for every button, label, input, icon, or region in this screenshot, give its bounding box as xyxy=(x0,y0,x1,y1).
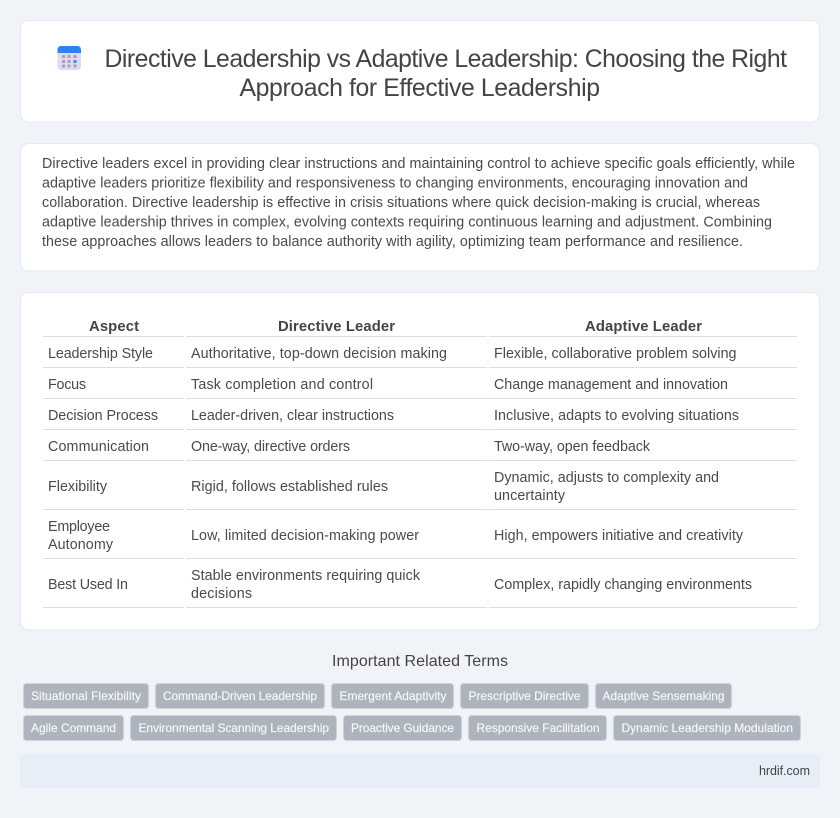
row: decision process: Decision Process xyxy=(48,408,158,424)
tag: Dynamic Leadership Modulation xyxy=(614,716,800,740)
text block: summary: these approaches allows leaders to balance authority with agility, optimizing team performance and resilience. xyxy=(42,234,743,250)
row: focus xyxy=(48,377,728,393)
row: flexibility xyxy=(48,470,719,504)
row: employee autonomy xyxy=(48,519,744,553)
row: best used in xyxy=(48,568,752,602)
tag: Environmental Scanning Leadership xyxy=(130,716,336,740)
tag: Situational Flexibility xyxy=(24,684,148,708)
row: communication: Two-way, open feedback xyxy=(494,439,651,455)
row: flexibility: uncertainty xyxy=(494,488,566,504)
tag: Prescriptive Directive: Prescriptive Directive xyxy=(468,689,581,703)
row: best used in: Complex, rapidly changing environments xyxy=(494,577,752,593)
row: employee autonomy: High, empowers initiative and creativity xyxy=(494,528,744,544)
row: decision process: Leader-driven, clear instructions xyxy=(191,408,394,424)
tag group: related terms xyxy=(24,684,800,740)
table header row: Directive Leader xyxy=(278,319,395,335)
row: leadership style: Leadership Style xyxy=(48,346,153,362)
text block: summary: Directive leaders excel in providing clear instructions and maintaining control to achieve specific goals efficiently, while xyxy=(42,156,795,172)
row: communication: One-way, directive orders xyxy=(191,439,350,455)
row: focus: Task completion and control xyxy=(191,377,373,393)
text block: summary: adaptive leaders prioritize flexibility and responsiveness to changing environments, encouraging innovation and xyxy=(42,176,748,192)
row: flexibility: Rigid, follows established rules xyxy=(191,479,388,495)
tag: Responsive Facilitation: Responsive Facilitation xyxy=(476,721,600,735)
row: employee autonomy: Employee xyxy=(48,519,110,535)
tag: Adaptive Sensemaking: Adaptive Sensemaking xyxy=(602,689,724,703)
footer bar xyxy=(20,754,820,788)
text block: summary: adaptive leadership thrives in complex, evolving contexts requiring continuous learning and adjustment. Combining xyxy=(42,214,772,230)
tag: Command-Driven Leadership xyxy=(156,684,324,708)
row: communication: Communication xyxy=(48,439,149,455)
title xyxy=(104,46,787,102)
panel: comparison table xyxy=(20,292,820,630)
row: employee autonomy: Autonomy xyxy=(48,537,114,553)
row: employee autonomy: Low, limited decision-making power xyxy=(191,528,419,544)
row: decision process: Inclusive, adapts to evolving situations xyxy=(494,408,739,424)
tag: Emergent Adaptivity xyxy=(332,684,454,708)
row: leadership style: Authoritative, top-down decision making xyxy=(191,346,447,362)
row: flexibility: Dynamic, adjusts to complexity and xyxy=(494,470,719,486)
panel: introduction paragraph xyxy=(20,144,820,271)
tag: Proactive Guidance xyxy=(344,716,462,740)
row: best used in: Best Used In xyxy=(48,577,128,593)
row: leadership style xyxy=(48,346,737,362)
row: focus: Change management and innovation xyxy=(494,377,728,393)
tag: Adaptive Sensemaking xyxy=(596,684,732,708)
row: best used in: Stable environments requiring quick xyxy=(191,568,421,584)
tag: Situational Flexibility: Situational Flexibility xyxy=(31,689,141,703)
text block: summary xyxy=(42,156,795,250)
footer bar: hrdif.com xyxy=(759,764,810,778)
row: communication xyxy=(48,439,651,455)
tag: Agile Command xyxy=(24,716,124,740)
heading: important related terms: Important Related Terms xyxy=(332,653,508,670)
table header row: Adaptive Leader xyxy=(585,319,702,335)
tag: Prescriptive Directive xyxy=(460,684,588,708)
tag: Environmental Scanning Leadership: Environmental Scanning Leadership xyxy=(138,721,329,735)
title: Approach for Effective Leadership xyxy=(240,75,600,102)
icon: calendar xyxy=(58,46,81,70)
tag: Dynamic Leadership Modulation: Dynamic Leadership Modulation xyxy=(622,721,793,735)
table header row: Aspect xyxy=(89,319,139,335)
tag: Proactive Guidance: Proactive Guidance xyxy=(351,721,454,735)
title: Directive Leadership vs Adaptive Leadership: Choosing the Right xyxy=(104,46,787,73)
tag: Emergent Adaptivity: Emergent Adaptivity xyxy=(340,689,447,703)
tag: Responsive Facilitation xyxy=(468,716,606,740)
tag: Agile Command: Agile Command xyxy=(31,721,116,735)
row: decision process xyxy=(48,408,739,424)
row: flexibility: Flexibility xyxy=(48,479,108,495)
row: leadership style: Flexible, collaborative problem solving xyxy=(494,346,737,362)
table header row xyxy=(89,319,702,335)
row: best used in: decisions xyxy=(191,586,252,602)
row: focus: Focus xyxy=(48,377,86,393)
tag: Command-Driven Leadership: Command-Driven Leadership xyxy=(163,689,317,703)
text block: summary: collaboration. Directive leadership is effective in crisis situations where quick decision-making is crucial, whereas xyxy=(42,195,760,211)
header panel xyxy=(20,20,820,122)
